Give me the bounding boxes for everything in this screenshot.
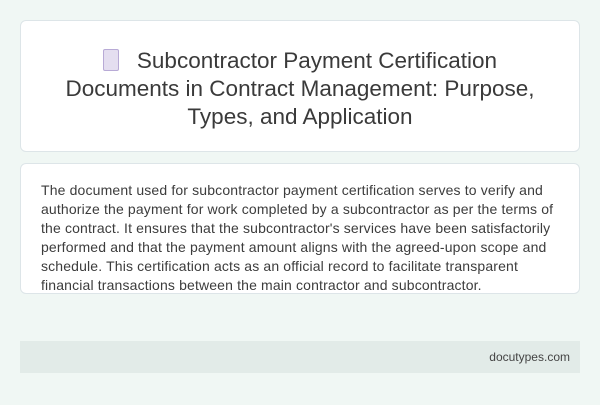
text block <box>41 182 554 293</box>
text block: financial transactions between the main contractor and subcontractor. <box>41 277 482 293</box>
footer <box>20 341 580 373</box>
text block: authorize the payment for work completed by a subcontractor as per the terms of <box>41 201 553 217</box>
text block: schedule. This certification acts as an official record to facilitate transparent <box>41 258 518 274</box>
panel: title <box>20 20 580 152</box>
panel: description <box>20 163 580 294</box>
footer text: docutypes.com <box>489 350 570 364</box>
text block: The document used for subcontractor payment certification serves to verify and <box>41 182 543 198</box>
icon: document <box>103 49 119 71</box>
title: Subcontractor Payment Certification Documents in Contract Management: Purpose, Types, and Application <box>66 48 534 129</box>
text block: performed and that the payment amount aligns with the agreed-upon scope and <box>41 239 546 255</box>
text block: the contract. It ensures that the subcontractor's services have been satisfactorily <box>41 220 550 236</box>
